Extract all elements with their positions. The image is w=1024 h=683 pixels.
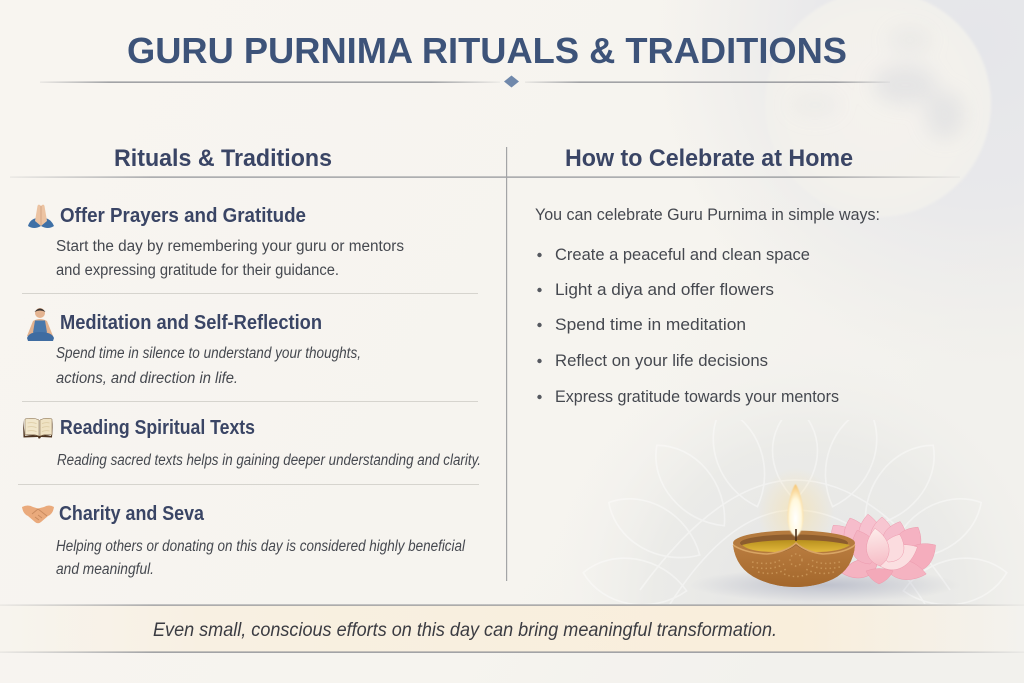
ritual: meditation — [27, 308, 361, 387]
mandala background pattern — [616, 420, 1005, 604]
ritual: charity: Charity and Seva — [59, 503, 205, 525]
lotus — [823, 513, 943, 584]
ritual: offer prayers: and expressing gratitude for their guidance. — [56, 262, 339, 279]
icon: handshake — [22, 506, 54, 523]
bullet list: Express gratitude towards your mentors — [555, 387, 839, 406]
bullet list: Reflect on your life decisions — [555, 351, 768, 370]
bullet list: Light a diya and offer flowers — [555, 280, 774, 299]
moon — [765, 0, 991, 217]
panel: how to celebrate list — [535, 205, 880, 406]
title: GURU PURNIMA RITUALS & TRADITIONS — [127, 30, 847, 71]
ritual: offer prayers — [28, 205, 404, 279]
ritual: reading: Reading Spiritual Texts — [60, 417, 255, 439]
ritual: meditation: actions, and direction in life. — [56, 370, 238, 387]
footer banner — [0, 604, 1024, 653]
ritual: reading: Reading sacred texts helps in gaining deeper understanding and clarity. — [57, 452, 481, 469]
title divider — [40, 76, 890, 88]
bullet list: Create a peaceful and clean space — [555, 245, 810, 264]
bullet list: Spend time in meditation — [555, 315, 746, 334]
bowl — [733, 545, 855, 587]
heading: rituals and traditions: Rituals & Traditions — [114, 145, 332, 172]
ritual: offer prayers: Start the day by remembering your guru or mentors — [56, 238, 404, 255]
column rules — [10, 147, 960, 581]
icon: open book — [23, 418, 53, 438]
icon: diya lamp and lotus — [690, 468, 960, 602]
intro text: You can celebrate Guru Purnima in simple ways: — [535, 205, 880, 224]
bullet list — [537, 245, 839, 406]
icon: meditating person — [27, 308, 54, 341]
ritual: charity: Helping others or donating on this day is considered highly beneficial — [56, 538, 465, 555]
flame — [788, 484, 804, 537]
footer text: Even small, conscious efforts on this day can bring meaningful transformation. — [153, 620, 777, 641]
icon: praying hands — [28, 205, 54, 228]
ritual: reading — [23, 417, 481, 469]
heading: how to celebrate at home: How to Celebrate at Home — [565, 145, 853, 172]
ritual: charity: and meaningful. — [56, 561, 154, 578]
ritual: meditation: Meditation and Self-Reflection — [60, 312, 322, 334]
panel: rituals list — [18, 205, 481, 578]
ritual: offer prayers: Offer Prayers and Gratitude — [60, 205, 306, 227]
ritual: charity — [22, 503, 465, 578]
ritual: meditation: Spend time in silence to understand your thoughts, — [56, 345, 361, 362]
